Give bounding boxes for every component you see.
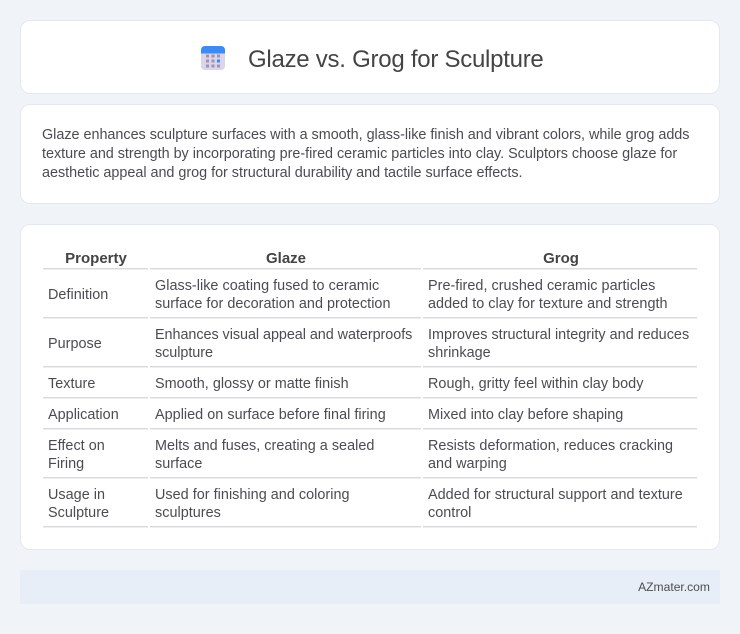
row: usage in sculpture: [43, 477, 697, 528]
row: definition: Definition: [48, 287, 108, 303]
row: definition: Pre-fired, crushed ceramic particles: [428, 278, 655, 294]
summary text: aesthetic appeal and grog for structural durability and tactile surface effects.: [42, 165, 522, 181]
row: texture: Smooth, glossy or matte finish: [155, 376, 349, 392]
row: purpose: Enhances visual appeal and waterproofs: [155, 327, 412, 343]
row: definition: added to clay for texture and strength: [428, 296, 668, 312]
row: effect on firing: Effect on: [48, 438, 105, 454]
row: definition: [43, 268, 697, 312]
row: usage in sculpture: control: [428, 505, 471, 521]
row: definition: Glass-like coating fused to ceramic: [155, 278, 379, 294]
row: effect on firing: and warping: [428, 456, 507, 472]
summary text: texture and strength by incorporating pre-fired ceramic particles into clay. Sculptors choose glaze for: [42, 146, 677, 162]
panel: comparison table: [20, 224, 720, 550]
row: purpose: shrinkage: [428, 345, 491, 361]
row: usage in sculpture: Added for structural support and texture: [428, 487, 683, 503]
summary text: [42, 127, 689, 181]
row: application: Mixed into clay before shaping: [428, 407, 623, 423]
panel: summary: [20, 104, 720, 204]
row: effect on firing: surface: [155, 456, 202, 472]
table header: Glaze: [266, 250, 306, 267]
row: application: Applied on surface before final firing: [155, 407, 386, 423]
row: usage in sculpture: Usage in: [48, 487, 105, 503]
row: usage in sculpture: sculptures: [155, 505, 221, 521]
row: purpose: Improves structural integrity and reduces: [428, 327, 689, 343]
row: purpose: sculpture: [155, 345, 213, 361]
row: effect on firing: [43, 428, 697, 472]
row: effect on firing: Melts and fuses, creating a sealed: [155, 438, 374, 454]
row: texture: Rough, gritty feel within clay body: [428, 376, 643, 392]
summary text: Glaze enhances sculpture surfaces with a smooth, glass-like finish and vibrant colors, while grog adds: [42, 127, 689, 143]
title: Glaze vs. Grog for Sculpture: [248, 46, 544, 73]
table header: [65, 250, 579, 267]
row: effect on firing: Resists deformation, reduces cracking: [428, 438, 673, 454]
row: definition: surface for decoration and protection: [155, 296, 390, 312]
row: application: [43, 397, 697, 423]
row: application: Application: [48, 407, 119, 423]
footer: [20, 570, 720, 604]
row: usage in sculpture: Sculpture: [48, 505, 109, 521]
panel: title card: [20, 20, 720, 94]
row: effect on firing: Firing: [48, 456, 84, 472]
table header: Property: [65, 250, 127, 267]
icon: calendar: [201, 46, 225, 70]
row: texture: Texture: [48, 376, 95, 392]
row: usage in sculpture: Used for finishing and coloring: [155, 487, 350, 503]
table header: Grog: [543, 250, 579, 267]
row: purpose: [43, 317, 697, 361]
row: purpose: Purpose: [48, 336, 102, 352]
row: texture: [43, 366, 697, 392]
footer credit: AZmater.com: [638, 580, 710, 594]
